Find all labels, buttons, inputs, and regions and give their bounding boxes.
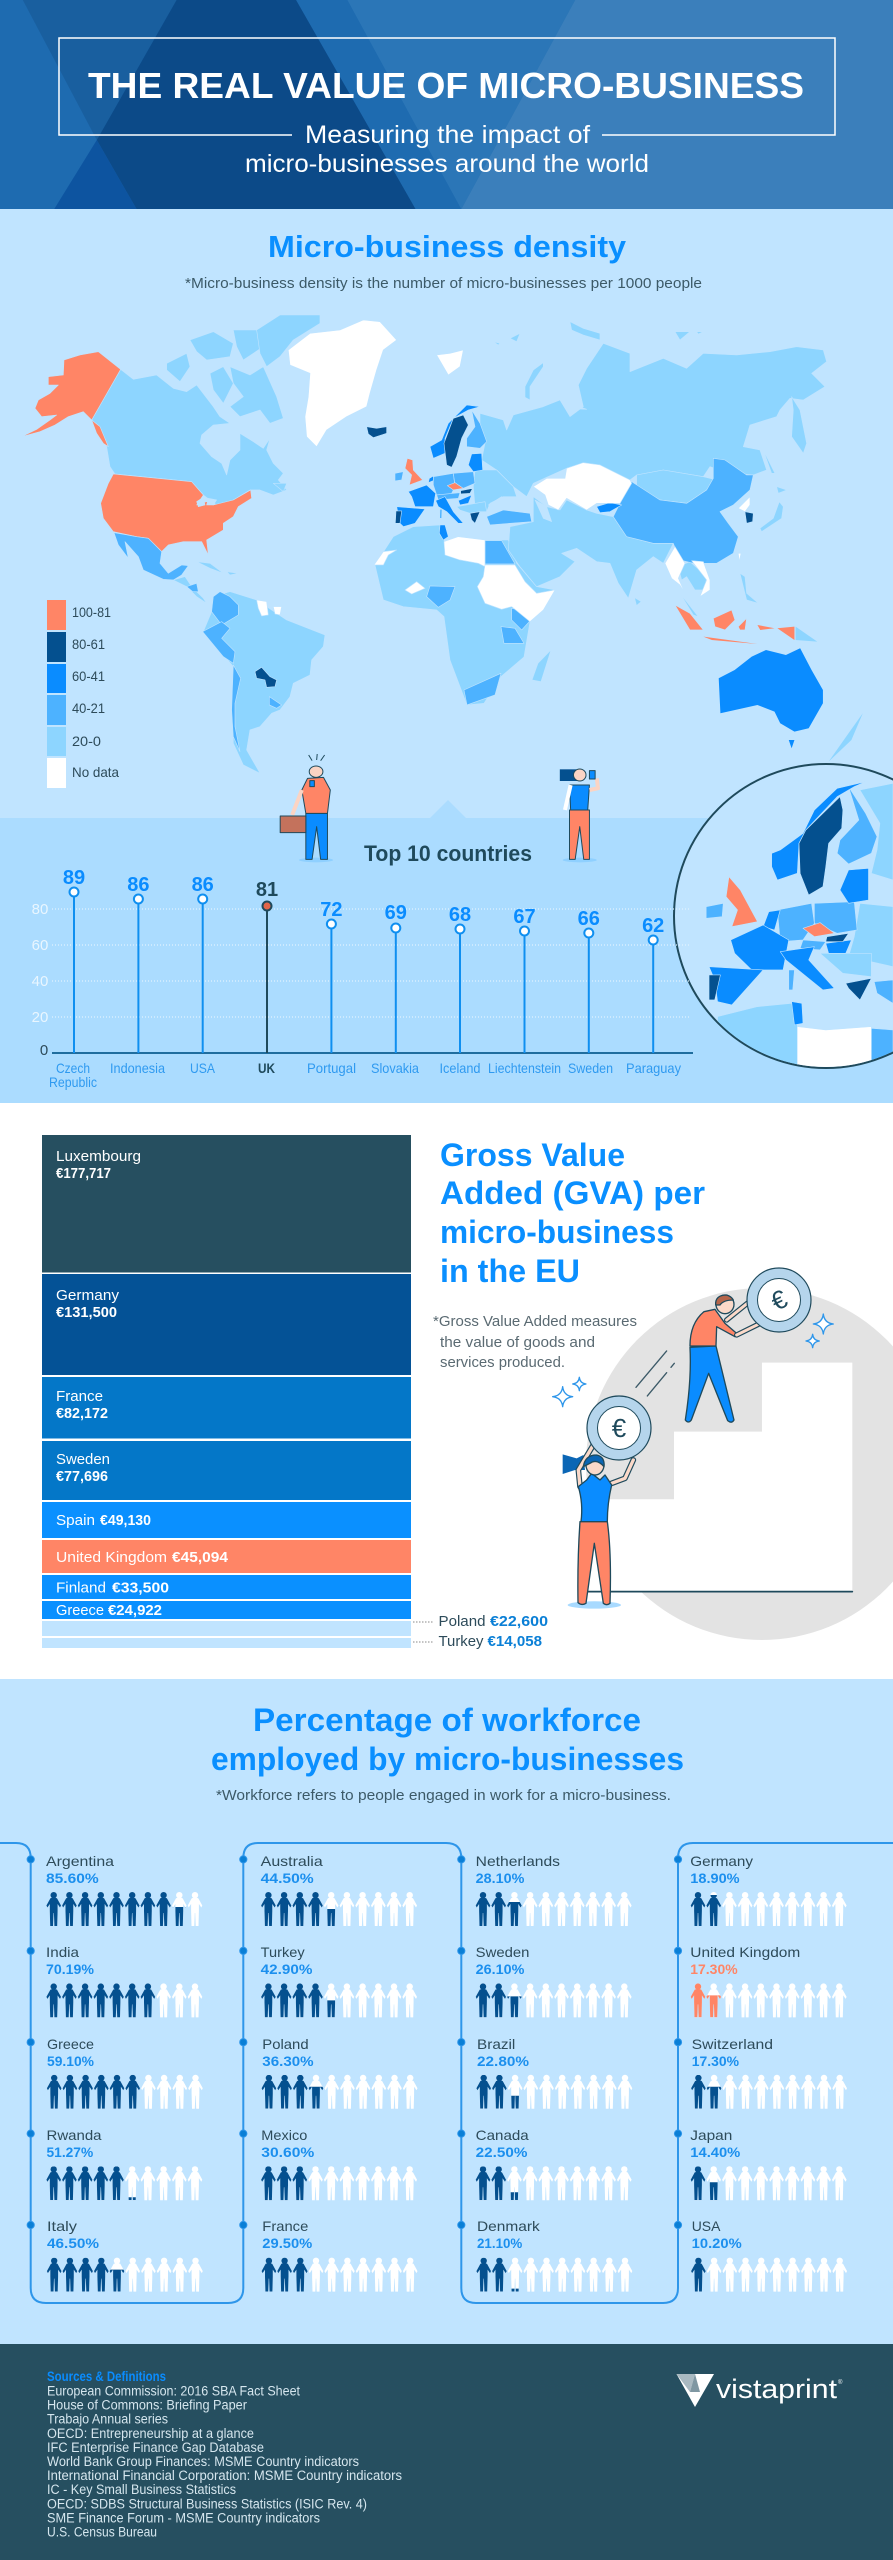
panel: workforce percentage <box>0 1679 893 2344</box>
gridlines <box>52 909 690 1017</box>
stat: Denmark: 21.10% <box>477 2235 523 2251</box>
stat: Switzerland: Switzerland <box>692 2036 773 2052</box>
panel: micro-business density <box>0 209 893 819</box>
stat: France: France <box>262 2218 309 2234</box>
stat: Germany <box>690 1853 847 1926</box>
country labels: Portugal <box>307 1060 356 1076</box>
callout: Poland and Turkey <box>413 1613 548 1650</box>
map: Oceania <box>635 598 863 762</box>
stacked GVA bar: €49,130 <box>100 1512 151 1529</box>
logo: vistaprint: ® <box>838 2379 843 2386</box>
stat: Canada <box>476 2127 632 2200</box>
stat: Poland: 36.30% <box>262 2053 314 2069</box>
stat: Argentina: Argentina <box>46 1853 114 1869</box>
stacked GVA bar: France <box>56 1388 103 1405</box>
country labels: Czech <box>56 1060 90 1076</box>
panel: top 10 countries <box>0 754 893 1103</box>
heading: GVA: Added (GVA) per <box>440 1175 705 1211</box>
timeline connector <box>0 1843 893 2303</box>
heading: density: Micro-business density <box>268 229 627 264</box>
values: 86 <box>127 874 150 896</box>
legend: No data <box>72 764 119 780</box>
stat: Sweden: 26.10% <box>476 1961 525 1977</box>
heading: workforce <box>211 1702 684 1777</box>
logo: vistaprint <box>676 2374 843 2407</box>
map: Eurasia and Africa <box>374 322 827 705</box>
stat: Australia: 44.50% <box>261 1870 314 1886</box>
stat: Italy: 46.50% <box>47 2235 100 2251</box>
stat: Japan: 14.40% <box>690 2144 741 2160</box>
stat: Germany: 18.90% <box>690 1870 740 1886</box>
callout: Poland and Turkey: Poland <box>438 1613 486 1630</box>
y-axis labels: 40 <box>32 973 48 990</box>
header banner <box>0 0 893 209</box>
stat: Japan <box>690 2127 847 2200</box>
stat: United Kingdom <box>690 1944 847 2017</box>
y-axis labels: 60 <box>32 937 48 954</box>
world map <box>22 315 863 773</box>
main title: THE REAL VALUE OF MICRO-BUSINESS <box>88 65 804 106</box>
heading: workforce: Percentage of workforce <box>253 1702 641 1738</box>
country labels: Iceland <box>440 1060 480 1076</box>
values: 68 <box>449 904 471 926</box>
stat: USA: USA <box>692 2218 721 2234</box>
sources list <box>47 2369 402 2540</box>
panel: gross value added <box>0 1103 893 1679</box>
stat: Mexico: 30.60% <box>261 2144 315 2160</box>
stat: Argentina: 85.60% <box>46 1870 99 1886</box>
heading: GVA: micro-business <box>440 1214 674 1250</box>
stat: Japan: Japan <box>690 2127 732 2143</box>
stat: Mexico: Mexico <box>261 2127 308 2143</box>
GVA definition: the value of goods and <box>440 1334 595 1351</box>
stat: India: 70.19% <box>46 1961 95 1977</box>
stat: Italy <box>47 2218 203 2292</box>
stacked GVA bar: Germany <box>56 1287 120 1304</box>
country labels: Liechtenstein <box>488 1060 561 1076</box>
sparkles <box>553 1314 833 1407</box>
stacked GVA bar: €177,717 <box>56 1165 111 1182</box>
stat: Australia <box>261 1853 417 1926</box>
callout: Poland and Turkey: €14,058 <box>488 1633 542 1650</box>
stat: Italy: Italy <box>47 2218 77 2234</box>
heading: GVA <box>440 1137 705 1289</box>
country labels: Paraguay <box>626 1060 681 1076</box>
sources list: U.S. Census Bureau <box>47 2524 157 2540</box>
stat: Turkey: Turkey <box>261 1944 305 1960</box>
stat: Germany: Germany <box>690 1853 753 1869</box>
values: 62 <box>642 915 664 937</box>
country labels <box>49 1060 681 1090</box>
stat: Sweden <box>476 1944 632 2017</box>
title frame <box>59 38 835 135</box>
stat: Brazil <box>476 2036 632 2109</box>
sources list: IFC Enterprise Finance Gap Database <box>47 2440 264 2455</box>
stacked GVA bar: €24,922 <box>108 1602 162 1619</box>
values: 69 <box>385 902 407 924</box>
sources list: International Financial Corporation: MSME Country indicators <box>47 2468 402 2483</box>
stat: Denmark: Denmark <box>477 2218 541 2234</box>
values: 67 <box>513 906 536 928</box>
stat: Brazil: Brazil <box>477 2036 515 2052</box>
lower coin: € <box>612 1413 627 1443</box>
stat: India <box>46 1944 202 2017</box>
person with briefcase <box>280 754 333 862</box>
sources list: OECD: SDBS Structural Business Statistics (ISIC Rev. 4) <box>47 2496 367 2511</box>
stat: USA: 10.20% <box>692 2235 742 2251</box>
country labels: Slovakia <box>371 1060 419 1076</box>
stacked GVA bar <box>42 1135 411 1648</box>
sources list: IC - Key Small Business Statistics <box>47 2482 236 2497</box>
stat: Rwanda: 51.27% <box>46 2144 94 2160</box>
stat: Rwanda <box>46 2127 202 2200</box>
legend: 100-81 <box>72 604 111 620</box>
values: 81 <box>256 879 278 901</box>
stacked GVA bar: €131,500 <box>56 1304 117 1321</box>
stacked GVA bar: Sweden <box>56 1451 110 1468</box>
heading: GVA: in the EU <box>440 1253 580 1289</box>
density definition: *Micro-business density is the number of micro-businesses per 1000 people <box>185 275 702 292</box>
lower person <box>563 1445 633 1605</box>
stat: Greece <box>47 2036 203 2109</box>
sources list: House of Commons: Briefing Paper <box>47 2398 247 2413</box>
heading: GVA: Gross Value <box>440 1137 625 1173</box>
stacked GVA bar: Spain <box>56 1512 95 1529</box>
country labels: USA <box>190 1060 216 1076</box>
values: 72 <box>320 899 343 921</box>
map: Americas <box>22 315 397 773</box>
stat: Canada: Canada <box>476 2127 529 2143</box>
legend: 80-61 <box>72 636 105 652</box>
GVA definition: *Gross Value Added measures <box>433 1313 637 1330</box>
legend: 20-0 <box>72 733 101 749</box>
country labels: Indonesia <box>110 1060 165 1076</box>
stat: Netherlands: 28.10% <box>476 1870 525 1886</box>
lollipop chart <box>32 867 693 1090</box>
y-axis labels: 20 <box>32 1009 48 1026</box>
y-axis labels: 80 <box>32 901 48 918</box>
footer <box>0 2344 893 2560</box>
stacked GVA bar: Finland <box>56 1580 106 1596</box>
illustration: euro coins on steps <box>553 1268 893 1640</box>
stat: India: India <box>46 1944 79 1960</box>
values: 86 <box>192 874 214 896</box>
sources list: OECD: Entrepreneurship at a glance <box>47 2426 254 2441</box>
sources list: Trabajo Annual series <box>47 2412 168 2427</box>
illustration: people on phones <box>280 754 598 862</box>
stat: Sweden: Sweden <box>476 1944 529 1960</box>
stacked GVA bar: €77,696 <box>56 1468 108 1485</box>
stat: Turkey <box>261 1944 417 2017</box>
values <box>63 867 664 937</box>
stat: Canada: 22.50% <box>476 2144 528 2160</box>
workforce definition: *Workforce refers to people engaged in work for a micro-business. <box>216 1787 671 1804</box>
Europe inset <box>674 764 893 1068</box>
subtitle: Measuring the impact of <box>305 121 590 149</box>
subtitle <box>245 121 649 178</box>
values: 66 <box>578 908 600 930</box>
heading: top 10 countries: Top 10 countries <box>364 841 532 866</box>
stat: Greece: 59.10% <box>47 2053 95 2069</box>
heading: workforce: employed by micro-businesses <box>211 1741 684 1777</box>
y-axis labels: 0 <box>40 1042 48 1059</box>
stacked GVA bar: €82,172 <box>56 1405 108 1422</box>
stat: Poland <box>262 2036 418 2109</box>
logo: vistaprint: vistaprint <box>716 2374 838 2404</box>
stat: USA <box>691 2218 847 2292</box>
person with flag <box>560 769 598 862</box>
legend <box>47 600 119 788</box>
stat: Mexico <box>261 2127 417 2200</box>
stacked GVA bar: United Kingdom <box>56 1549 167 1566</box>
sources list: Sources & Definitions <box>47 2369 166 2384</box>
lower coin <box>587 1396 651 1460</box>
stat: Rwanda: Rwanda <box>46 2127 102 2143</box>
values: 89 <box>63 867 85 889</box>
timeline dots <box>27 1856 682 2229</box>
legend: 60-41 <box>72 668 105 684</box>
stat: Turkey: 42.90% <box>261 1961 313 1977</box>
legend: 40-21 <box>72 700 105 716</box>
sources list: SME Finance Forum - MSME Country indicators <box>47 2510 320 2525</box>
stat: United Kingdom: United Kingdom <box>690 1944 800 1960</box>
country labels: UK <box>258 1060 275 1076</box>
stat: France <box>262 2218 418 2292</box>
stat: Brazil: 22.80% <box>477 2053 530 2069</box>
upper person <box>685 1295 758 1422</box>
stat: Switzerland: 17.30% <box>692 2053 740 2069</box>
stat: Argentina <box>46 1853 202 1926</box>
country labels: Republic <box>49 1074 97 1090</box>
stat: Switzerland <box>691 2036 847 2109</box>
stat: Poland: Poland <box>262 2036 309 2052</box>
stacked GVA bar: €45,094 <box>172 1549 229 1566</box>
y-axis labels <box>32 901 48 1059</box>
subtitle: micro-businesses around the world <box>245 150 649 178</box>
stat: Netherlands <box>476 1853 632 1926</box>
GVA definition <box>433 1313 637 1371</box>
stat: Netherlands: Netherlands <box>476 1853 560 1869</box>
stacked GVA bar: €33,500 <box>112 1580 169 1596</box>
GVA definition: services produced. <box>440 1354 565 1371</box>
stat: Denmark <box>476 2218 632 2292</box>
upper coin <box>747 1268 811 1332</box>
stat: Greece: Greece <box>47 2036 94 2052</box>
stacked GVA bar: Greece <box>56 1602 104 1619</box>
upper coin: € <box>766 1283 792 1317</box>
sources list: World Bank Group Finances: MSME Country indicators <box>47 2454 359 2469</box>
country labels: Sweden <box>568 1060 613 1076</box>
stacked GVA bar: Luxembourg <box>56 1148 141 1165</box>
callout: Poland and Turkey: Turkey <box>438 1633 484 1650</box>
sources list: European Commission: 2016 SBA Fact Sheet <box>47 2384 300 2398</box>
callout: Poland and Turkey: €22,600 <box>490 1613 548 1630</box>
stat: Australia: Australia <box>261 1853 323 1869</box>
stat: United Kingdom: 17.30% <box>690 1961 738 1977</box>
stat: France: 29.50% <box>262 2235 313 2251</box>
